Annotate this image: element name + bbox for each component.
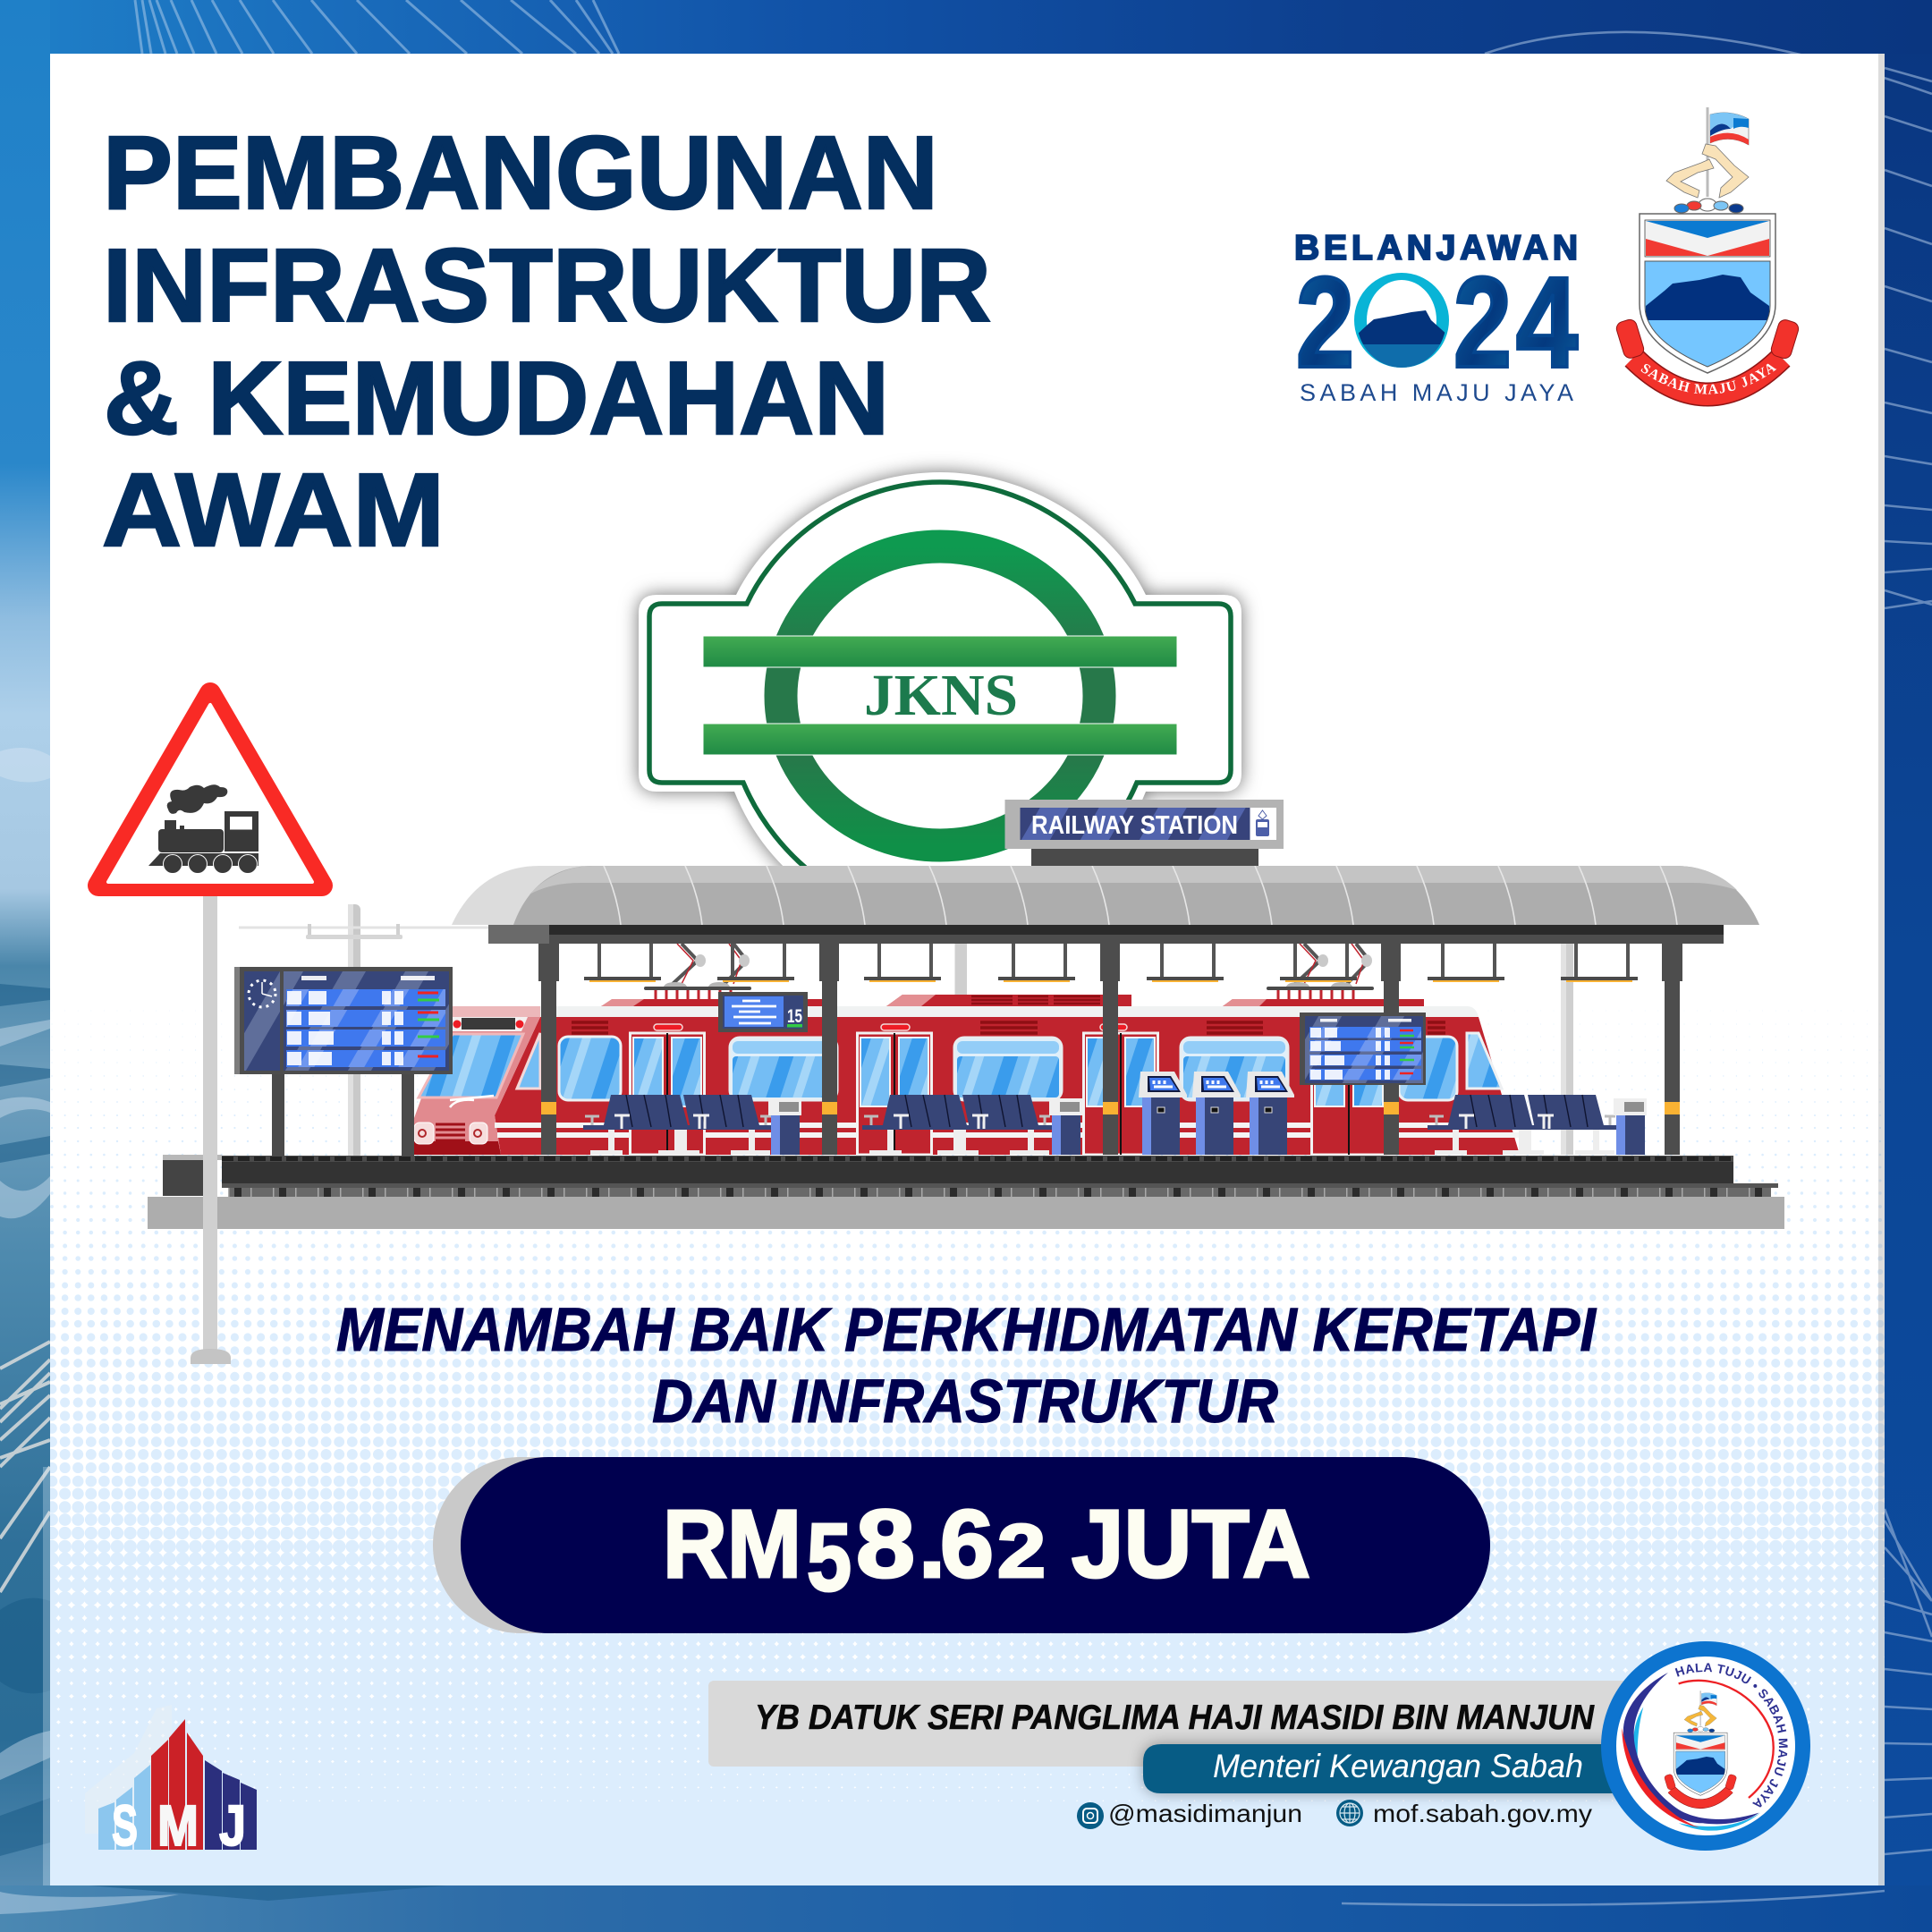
Hala Tuju badge (1601, 1641, 1810, 1851)
title: AWAM (102, 452, 445, 568)
Belanjawan 2024 logo: 2 (1296, 250, 1354, 394)
SMJ logo (85, 1705, 257, 1858)
Belanjawan 2024 logo: 4 (1516, 250, 1578, 394)
platform seats, posts and kiosks (583, 1072, 1647, 1155)
amount pill: . (919, 1489, 945, 1597)
departure board right (1300, 1013, 1426, 1085)
railway crossing sign (98, 693, 322, 1364)
title: & KEMUDAHAN (104, 340, 889, 456)
railway station sign: RAILWAY STATION (1031, 811, 1238, 840)
red train (414, 944, 1521, 1155)
departure board left (234, 967, 453, 1156)
Hala Tuju badge: HALA TUJU • SABAH MAJU JAYA (1674, 1663, 1788, 1808)
minister title pill: Menteri Kewangan Sabah (1213, 1748, 1583, 1784)
amount pill: JUTA (1072, 1489, 1310, 1597)
title: PEMBANGUNAN (103, 114, 938, 231)
SMJ logo: J (219, 1793, 246, 1858)
social handles (1077, 1800, 1592, 1829)
Belanjawan 2024 logo (1294, 229, 1578, 406)
Sabah coat of arms (1615, 107, 1800, 406)
amount pill: 2 (997, 1509, 1046, 1593)
Sabah coat of arms: SABAH MAJU JAYA (1640, 363, 1776, 394)
background utility pole (239, 904, 1573, 1159)
canopy roof (452, 866, 1759, 944)
amount pill: 5 (807, 1503, 852, 1611)
amount pill: 6 (940, 1489, 994, 1597)
amount pill: RM (663, 1489, 801, 1597)
JKNS station logo: JKNS (864, 663, 1018, 728)
railway station sign (1005, 800, 1284, 866)
amount pill (433, 1457, 1490, 1633)
SMJ logo: S (112, 1793, 138, 1858)
subtitle: MENAMBAH BAIK PERKHIDMATAN KERETAPI (336, 1295, 1597, 1364)
subtitle: DAN INFRASTRUKTUR (652, 1367, 1278, 1436)
subtitle (336, 1295, 1597, 1436)
amount pill: 8 (856, 1489, 915, 1597)
canopy columns and lamps (538, 944, 1682, 1155)
minister name bar (708, 1681, 1639, 1767)
departure board platform 15 (718, 992, 808, 1032)
title (102, 114, 991, 568)
Belanjawan 2024 logo: SABAH MAJU JAYA (1300, 379, 1573, 406)
social handles: mof.sabah.gov.my (1373, 1800, 1592, 1827)
JKNS station logo (639, 472, 1241, 930)
platform and track (148, 1155, 1784, 1229)
title: INFRASTRUKTUR (103, 227, 991, 343)
SMJ logo: M (157, 1793, 199, 1858)
Belanjawan 2024 logo: 2 (1453, 250, 1512, 394)
social handles: @masidimanjun (1108, 1800, 1302, 1827)
minister name bar: YB DATUK SERI PANGLIMA HAJI MASIDI BIN MANJUN (755, 1699, 1595, 1737)
minister title pill (1143, 1744, 1637, 1793)
Belanjawan 2024 logo: BELANJAWAN (1294, 229, 1578, 267)
departure board platform 15: 15 (787, 1006, 802, 1027)
